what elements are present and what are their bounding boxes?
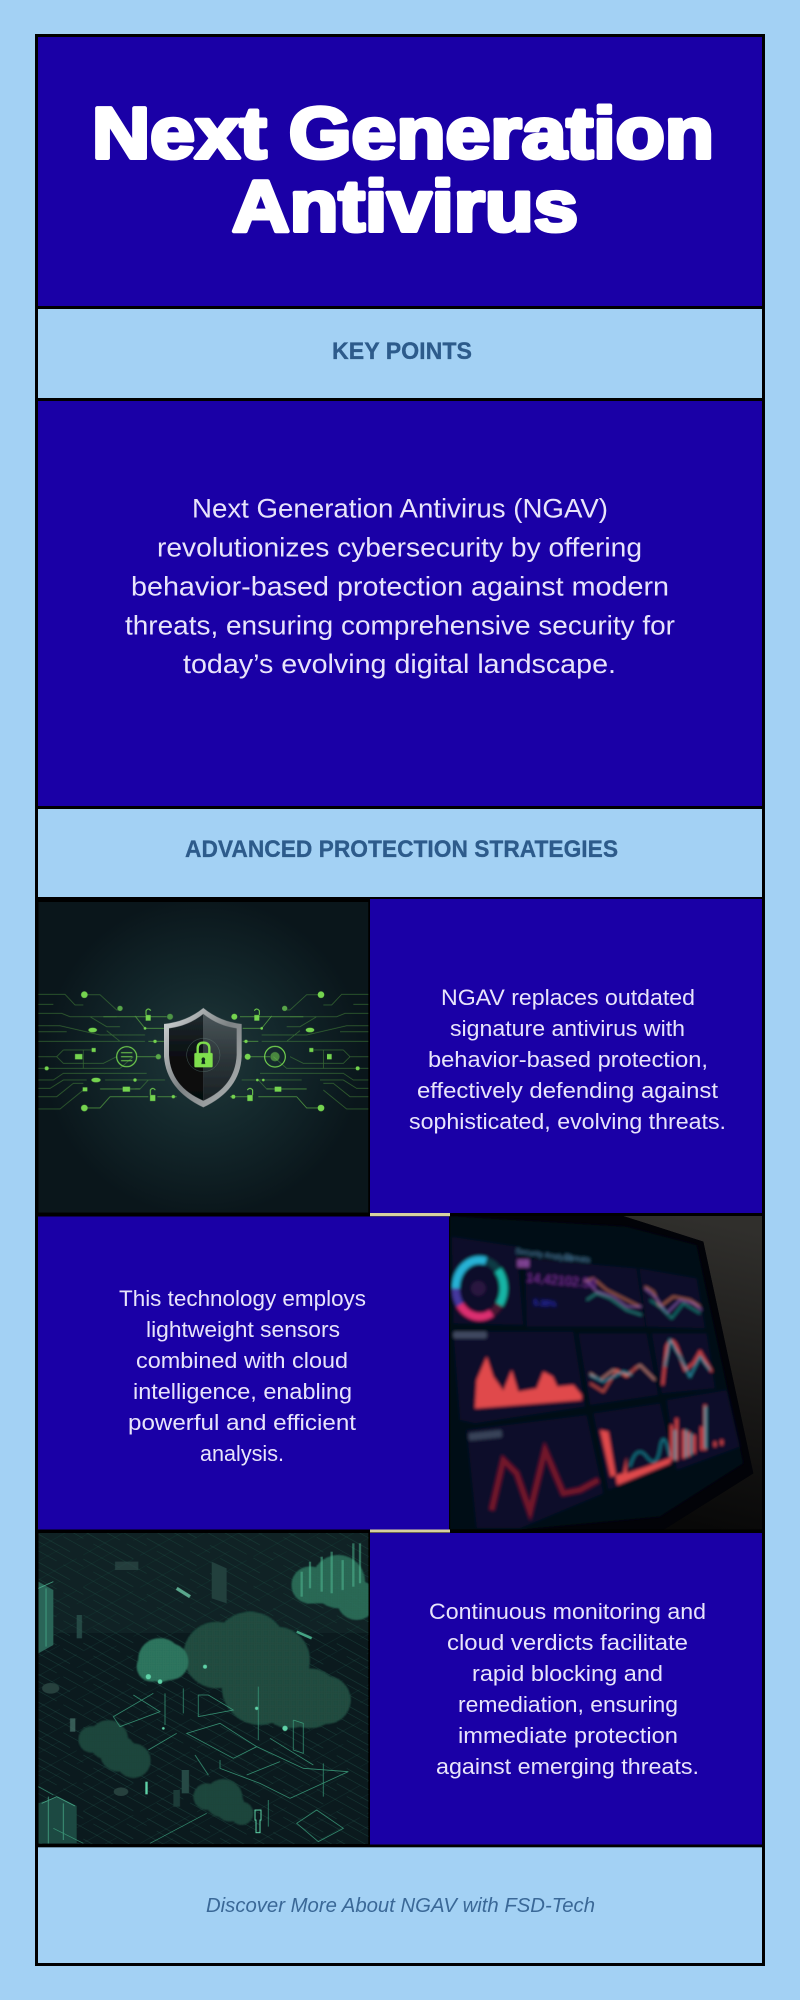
line charts xyxy=(584,1278,702,1392)
row 3 text panel: remediation, ensuring xyxy=(458,1692,678,1717)
red and teal bar charts xyxy=(600,1430,672,1485)
intro paragraph: behavior-based protection against modern xyxy=(131,572,669,602)
dashboard small labels: 14,42102.58 xyxy=(526,1271,597,1291)
intro paragraph: Next Generation Antivirus (NGAV) xyxy=(192,494,608,524)
row 2 text panel: combined with cloud xyxy=(136,1348,348,1373)
key points heading band: KEY POINTS xyxy=(332,338,472,365)
title text: Antivirus xyxy=(232,167,578,247)
row 2 text panel xyxy=(38,1216,449,1530)
row 2 to row 3 divider accent xyxy=(370,1530,450,1532)
circuit artwork xyxy=(38,991,368,1111)
row 1 to row 2 divider accent xyxy=(370,1213,450,1216)
row 1 text panel xyxy=(370,899,762,1213)
dashboard small labels xyxy=(515,1246,597,1309)
dashboard screen xyxy=(450,1216,743,1530)
red area chart xyxy=(475,1357,582,1408)
intro paragraph: today’s evolving digital landscape. xyxy=(183,649,616,679)
row 1 text panel: behavior-based protection, xyxy=(428,1047,708,1072)
padlock icon xyxy=(194,1043,213,1067)
advanced protection strategies heading band xyxy=(38,809,762,897)
title text: Next Generation xyxy=(92,94,714,174)
dashboard tiles xyxy=(452,1237,740,1528)
row 3 text panel xyxy=(370,1533,762,1844)
key points heading band xyxy=(38,309,762,398)
left circuit traces xyxy=(38,991,177,1111)
donut chart xyxy=(456,1260,504,1317)
bottom cloud xyxy=(193,1779,253,1825)
small bright cloud xyxy=(137,1638,188,1682)
large central cloud xyxy=(183,1612,351,1728)
footer band: Discover More About NGAV with FSD-Tech xyxy=(206,1894,595,1917)
row 1 text panel: effectively defending against xyxy=(417,1078,718,1103)
row 2 text panel: analysis. xyxy=(200,1441,284,1466)
lower left cloud xyxy=(78,1720,151,1778)
intro paragraph: revolutionizes cybersecurity by offering xyxy=(157,532,642,562)
title text xyxy=(92,94,714,247)
top-right cloud xyxy=(291,1555,377,1620)
circuit nodes xyxy=(45,991,175,1111)
row 3 text panel: Continuous monitoring and xyxy=(429,1599,706,1624)
row 1 text panel: signature antivirus with xyxy=(450,1016,685,1041)
row 1 text panel: NGAV replaces outdated xyxy=(441,985,695,1010)
dim red line chart xyxy=(492,1450,598,1512)
row 2 text panel: lightweight sensors xyxy=(146,1317,340,1342)
row 3 text panel: against emerging threats. xyxy=(436,1754,699,1779)
image: shield with padlock and circuit lines xyxy=(38,902,368,1213)
image: isometric circuit city with data clouds xyxy=(38,1533,377,1844)
footer band xyxy=(38,1847,762,1963)
row 2 text panel: powerful and efficient xyxy=(128,1410,356,1435)
soft artwork xyxy=(38,1533,377,1844)
advanced protection strategies heading band: ADVANCED PROTECTION STRATEGIES xyxy=(185,836,618,863)
row 3 text panel: rapid blocking and xyxy=(472,1661,663,1686)
dashboard small labels: Threats xyxy=(564,1252,591,1265)
shield xyxy=(164,1008,242,1107)
intro panel xyxy=(38,401,762,806)
title panel xyxy=(38,37,762,306)
glowing circuit traces xyxy=(38,1543,360,1843)
clouds xyxy=(78,1555,377,1825)
dashboard small labels: Security Analysis xyxy=(515,1246,574,1263)
intro paragraph: threats, ensuring comprehensive security for xyxy=(125,610,675,640)
row 2 text panel: This technology employs xyxy=(119,1286,366,1311)
right circuit traces, mirrored xyxy=(230,991,368,1111)
row 2 text panel: intelligence, enabling xyxy=(133,1379,352,1404)
row 1 text panel: sophisticated, evolving threats. xyxy=(409,1109,726,1134)
towers xyxy=(38,1562,312,1843)
intro paragraph xyxy=(125,494,675,679)
dashboard small labels: 5.38% xyxy=(533,1298,556,1309)
row 3 text panel: immediate protection xyxy=(458,1723,678,1748)
image: blurred analytics dashboard on a tablet xyxy=(450,1215,763,1530)
row 3 text panel: cloud verdicts facilitate xyxy=(447,1630,688,1655)
